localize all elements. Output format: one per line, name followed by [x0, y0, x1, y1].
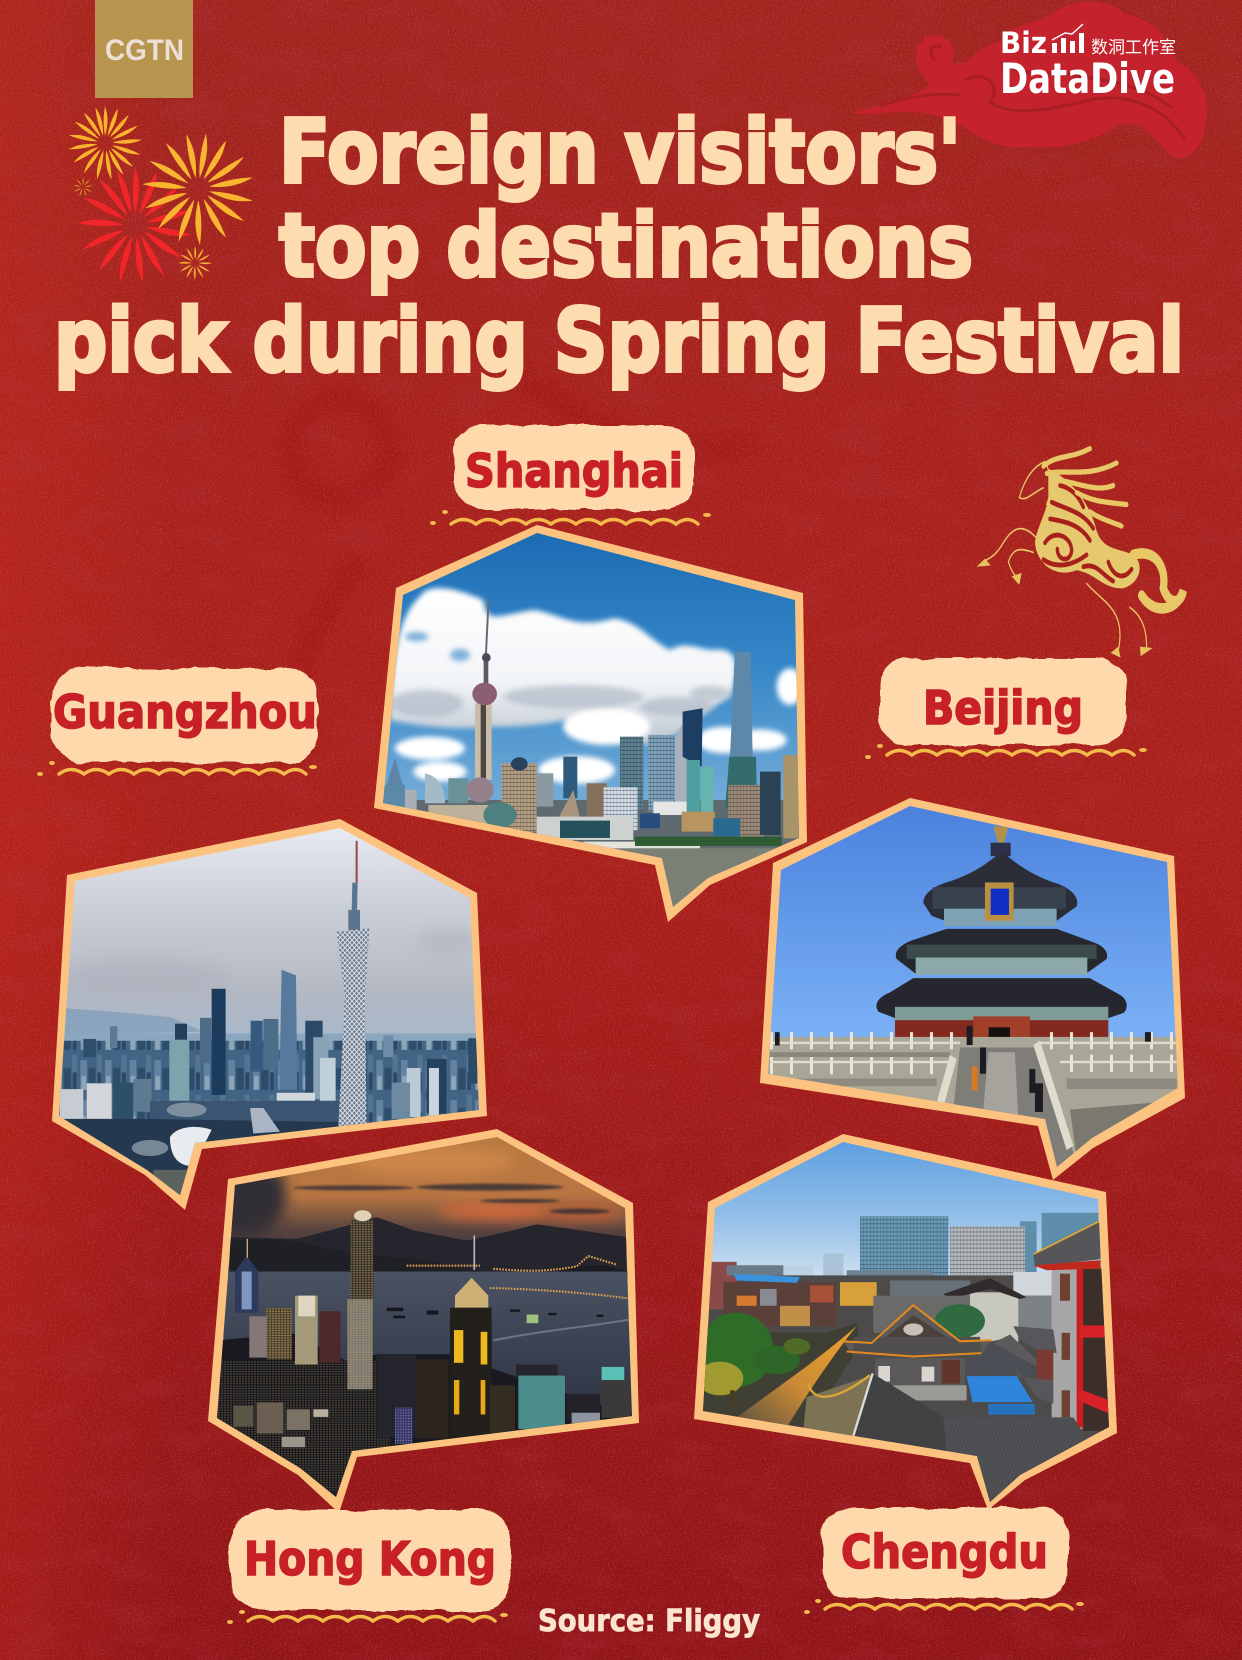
panel: Hong Kong photo	[200, 1129, 650, 1513]
title	[54, 101, 1184, 392]
squiggle	[865, 744, 1147, 759]
horse mane	[1043, 449, 1127, 526]
foreground roofs	[803, 1373, 1088, 1505]
title: Foreign visitors'	[279, 101, 961, 203]
label: Beijing: Beijing	[923, 681, 1083, 735]
dark side roofs and grey annex	[963, 1340, 1038, 1377]
label: Hong Kong	[227, 1510, 511, 1624]
river and shore	[583, 836, 782, 907]
icon: golden horse	[977, 449, 1183, 658]
CGTN logo: CGTN	[105, 34, 184, 67]
label: Shanghai	[430, 425, 711, 525]
label: Chengdu	[804, 1508, 1084, 1614]
right red building	[1033, 1221, 1112, 1431]
firework: small top yellow	[68, 106, 142, 180]
label: Shanghai: Shanghai	[465, 444, 683, 498]
logo: Biz DataDive: DataDive	[1000, 54, 1175, 103]
firework: small bottom	[178, 246, 212, 280]
visitors	[775, 1026, 1151, 1112]
logo: Biz DataDive: Biz	[1000, 26, 1047, 60]
foreground	[63, 1102, 362, 1195]
haze city towers	[83, 970, 477, 1113]
Canton Tower	[337, 841, 369, 1128]
label: Guangzhou: Guangzhou	[53, 685, 317, 739]
squiggle	[430, 510, 711, 525]
Temple of Heaven	[876, 826, 1127, 1047]
central temple	[843, 1305, 992, 1387]
mountains	[230, 1217, 627, 1275]
panel: Shanghai photo	[360, 523, 820, 932]
mid city	[60, 1068, 439, 1137]
source note: Source: Fliggy	[538, 1604, 760, 1639]
central stairs	[940, 1043, 1075, 1172]
skyline	[380, 652, 807, 867]
firework: red	[77, 167, 193, 283]
title: top destinations	[279, 195, 973, 297]
harbour	[223, 1272, 637, 1420]
icon: fireworks	[68, 106, 254, 283]
squiggle	[804, 1599, 1084, 1614]
street	[700, 1323, 860, 1431]
horse tail	[1133, 553, 1183, 608]
panel: Chengdu photo	[680, 1130, 1140, 1510]
panel: Guangzhou photo	[30, 817, 500, 1210]
squiggle	[37, 761, 317, 776]
blue awning	[967, 1376, 1035, 1415]
firework: small left	[73, 177, 93, 197]
label: Guangzhou	[37, 668, 318, 776]
label: Hong Kong: Hong Kong	[244, 1532, 496, 1586]
icon: bars and trend line	[1052, 24, 1084, 53]
clouds	[390, 588, 803, 784]
eaves right	[1013, 1326, 1057, 1404]
decorative red cloud	[851, 2, 1207, 158]
white house	[943, 1278, 1027, 1343]
marble terraces	[768, 1032, 1178, 1167]
horse outline and legs	[983, 462, 1147, 650]
trees	[697, 1313, 810, 1407]
label: Chengdu: Chengdu	[841, 1525, 1048, 1579]
logo: Biz DataDive: 数洞工作室	[1091, 38, 1176, 57]
Oriental Pearl Tower	[466, 598, 517, 828]
logo: Biz DataDive	[1000, 24, 1176, 103]
distant towers	[784, 1212, 1098, 1276]
left dusk shadow and sunset glow	[200, 1148, 627, 1237]
panel: Beijing photo	[750, 798, 1200, 1190]
horse hooves	[977, 559, 991, 567]
city towers	[235, 1210, 630, 1444]
firework: large yellow	[142, 133, 254, 245]
CGTN logo	[95, 0, 193, 98]
squiggle	[227, 1610, 508, 1624]
old street buildings	[700, 1262, 877, 1326]
horse body	[1035, 469, 1140, 588]
label: Beijing	[865, 658, 1147, 759]
dark foreground	[213, 1334, 633, 1499]
